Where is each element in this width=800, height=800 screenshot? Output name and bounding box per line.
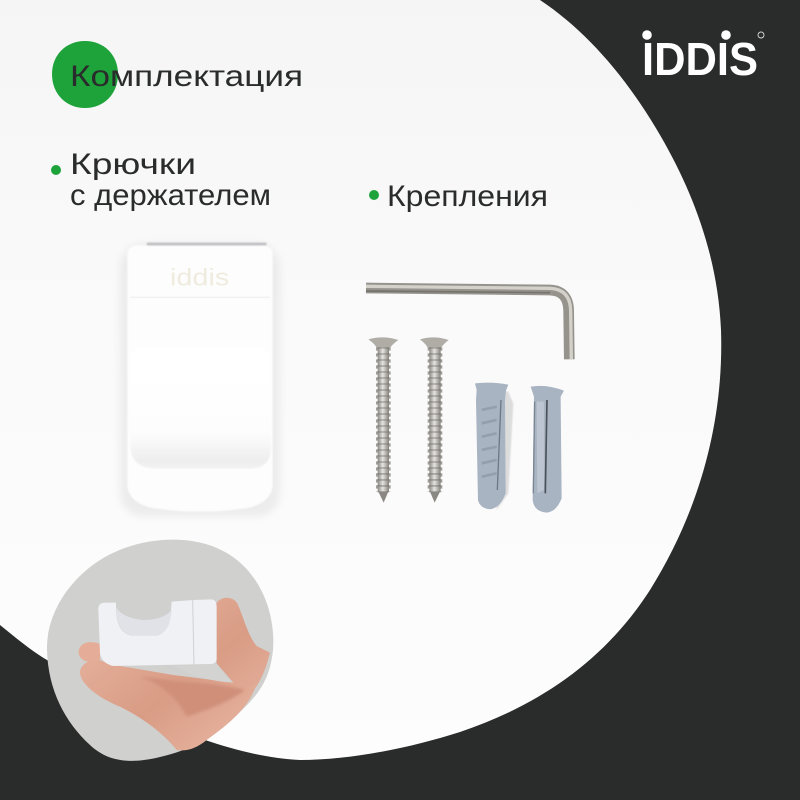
white hook product: iddis (170, 265, 229, 292)
gap between hook and palm (173, 664, 233, 683)
white hook product (120, 243, 280, 517)
screw 1 (368, 337, 398, 503)
label: fasteners: Крепления (387, 180, 548, 213)
hand (79, 598, 270, 750)
label: hooks with holder: Крючки (70, 148, 196, 181)
title: Комплектация (70, 60, 303, 93)
label: hooks with holder: с держателем (70, 179, 271, 212)
label: hooks with holder (51, 148, 271, 212)
palm and fingers (80, 598, 270, 750)
inset photo: hook held in hand (47, 540, 273, 761)
green title blob (52, 41, 118, 108)
screw 2 (420, 337, 449, 503)
hook in hand (98, 599, 217, 666)
photo background (47, 540, 273, 761)
index fingertip (79, 642, 100, 662)
hex wrench (366, 286, 571, 359)
wall plug 1 (475, 383, 513, 510)
palm shadow (140, 677, 245, 717)
logo: iddis: IDDIS (642, 33, 758, 85)
wall plug 2 (531, 386, 564, 513)
